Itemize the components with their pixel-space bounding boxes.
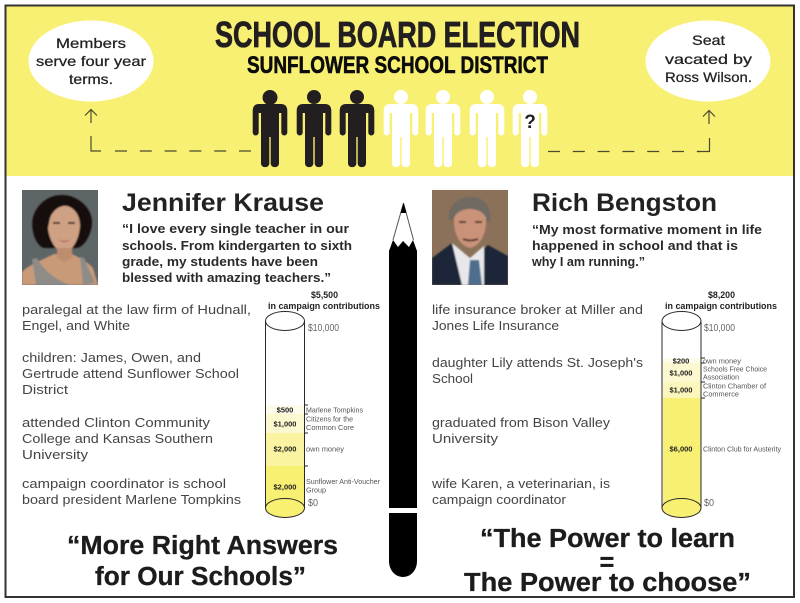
- quote: Jennifer Krause: [122, 222, 352, 285]
- seat 2 filled: [297, 90, 331, 167]
- quote: Jennifer Krause: schools. From kindergarten to sixth: [122, 239, 352, 253]
- slogan: Bengston: The Power to choose”: [464, 569, 751, 597]
- callout: vacated seat: Seat: [692, 32, 725, 48]
- biography: Jennifer Krause: [22, 302, 251, 507]
- sources: Marlene Tompkins: [306, 406, 363, 414]
- amounts: $1,000: [670, 368, 692, 378]
- sources: own money: [306, 444, 344, 454]
- scale labels: $10,000: [308, 322, 339, 334]
- sources: [703, 356, 781, 454]
- biography: Jennifer Krause: board president Marlene Tompkins: [22, 492, 242, 507]
- callout: term length: serve four year: [36, 53, 146, 69]
- callout: term length: Members: [56, 35, 126, 51]
- biography: Rich Bengston: graduated from Bison Valley: [432, 415, 611, 430]
- callout: term length: [28, 20, 154, 102]
- photo: Rich Bengston: [432, 190, 508, 285]
- quote: Rich Bengston: “My most formative moment in life: [532, 223, 762, 237]
- photo: Jennifer Krause: [22, 190, 98, 285]
- chart heading: in campaign contributions: [268, 301, 380, 311]
- icon: pencil divider: [389, 203, 417, 577]
- scale labels: [308, 322, 339, 509]
- amounts: $2,000: [274, 444, 296, 454]
- sources: Commerce: [703, 390, 739, 398]
- biography: Jennifer Krause: attended Clinton Community: [22, 415, 211, 430]
- biography: Rich Bengston: life insurance broker at Miller and: [432, 302, 643, 317]
- biography: Rich Bengston: wife Karen, a veterinarian, is: [431, 476, 611, 491]
- chart: Bengston contributions tube: [662, 290, 781, 518]
- slogan: Krause: [67, 532, 338, 591]
- sources: Association: [703, 372, 739, 382]
- amounts: $500: [277, 406, 293, 414]
- chart heading: $5,500: [311, 290, 338, 300]
- callout: vacated seat: Ross Wilson.: [665, 69, 752, 85]
- seat 4 open: [384, 90, 418, 167]
- seat 6 open: [470, 90, 504, 167]
- biography: Jennifer Krause: Gertrude attend Sunflower School: [22, 366, 239, 381]
- chart heading: in campaign contributions: [665, 301, 777, 311]
- biography: Jennifer Krause: paralegal at the law firm of Hudnall,: [22, 302, 251, 317]
- sources: own money: [703, 356, 741, 366]
- seat 3 filled: [340, 90, 374, 167]
- scale labels: $0: [704, 497, 714, 509]
- seat 1 filled: [253, 90, 287, 167]
- sources: Clinton Chamber of: [703, 382, 767, 390]
- biography: Rich Bengston: daughter Lily attends St. Joseph's: [432, 355, 644, 370]
- candidate name: Rich Bengston: Rich Bengston: [532, 189, 717, 217]
- fill segments: [266, 405, 304, 518]
- quote: Jennifer Krause: blessed with amazing teachers.”: [122, 271, 331, 285]
- arrow: right dashed connector: [548, 110, 715, 152]
- sources: Schools Free Choice: [703, 364, 767, 374]
- biography: Rich Bengston: Jones Life Insurance: [432, 318, 559, 333]
- quote: Jennifer Krause: “I love every single teacher in our: [122, 222, 349, 236]
- slogan: Bengston: =: [600, 549, 614, 577]
- biography: Rich Bengston: campaign coordinator: [432, 492, 567, 507]
- arrow: left dashed connector: [85, 110, 252, 151]
- chart: Krause contributions tube: [266, 290, 380, 518]
- sources: Citizens for the: [306, 414, 353, 424]
- tube outline: [266, 312, 308, 518]
- amounts: [670, 356, 692, 454]
- biography: Jennifer Krause: University: [22, 447, 89, 462]
- sources: Group: [306, 486, 326, 494]
- title: SCHOOL BOARD ELECTION: [215, 14, 580, 55]
- amounts: [274, 406, 296, 492]
- amounts: $6,000: [670, 444, 692, 454]
- amounts: $1,000: [670, 386, 692, 394]
- biography: Jennifer Krause: children: James, Owen, and: [22, 350, 201, 365]
- biography: Rich Bengston: [431, 302, 644, 507]
- biography: Jennifer Krause: campaign coordinator is school: [22, 476, 226, 491]
- amounts: $1,000: [274, 420, 296, 428]
- callout: vacated seat: vacated by: [665, 51, 752, 67]
- slogan: Krause: for Our Schools”: [95, 563, 306, 591]
- slogan: Krause: “More Right Answers: [67, 532, 338, 560]
- slogan: Bengston: “The Power to learn: [480, 525, 735, 553]
- scale labels: $10,000: [704, 322, 735, 334]
- callout: term length: terms.: [69, 71, 113, 87]
- quote: Rich Bengston: [531, 223, 762, 269]
- sources: [306, 406, 380, 494]
- biography: Rich Bengston: University: [432, 431, 499, 446]
- slogan: Bengston: [464, 525, 751, 597]
- chart heading: [268, 290, 380, 311]
- amounts: $2,000: [274, 482, 296, 492]
- quote: Rich Bengston: why I am running.”: [531, 255, 645, 269]
- biography: Jennifer Krause: District: [22, 382, 68, 397]
- header band: [6, 6, 794, 176]
- candidate name: Jennifer Krause: Jennifer Krause: [122, 189, 324, 217]
- sources: Clinton Club for Austerity: [703, 444, 781, 454]
- amounts: $200: [673, 356, 689, 366]
- seat 7 contested: ?: [524, 112, 536, 133]
- sources: Sunflower Anti-Voucher: [306, 477, 380, 486]
- biography: Jennifer Krause: College and Kansas Southern: [22, 431, 213, 446]
- chart heading: [665, 290, 777, 311]
- sources: Common Core: [306, 423, 354, 432]
- seat 5 open: [426, 90, 460, 167]
- subtitle: SUNFLOWER SCHOOL DISTRICT: [247, 52, 548, 79]
- board seats: people icons: [253, 90, 547, 167]
- tube outline: [662, 312, 705, 518]
- callout: vacated seat: [646, 20, 770, 102]
- quote: Rich Bengston: happened in school and that is: [532, 239, 738, 253]
- biography: Rich Bengston: School: [432, 371, 473, 386]
- scale labels: $0: [308, 497, 318, 509]
- quote: Jennifer Krause: grade, my students have been: [122, 255, 318, 269]
- scale labels: [704, 322, 735, 509]
- seat 7 contested: [513, 90, 547, 167]
- fill segments: [663, 358, 701, 518]
- chart heading: $8,200: [708, 290, 735, 300]
- biography: Jennifer Krause: Engel, and White: [22, 318, 130, 333]
